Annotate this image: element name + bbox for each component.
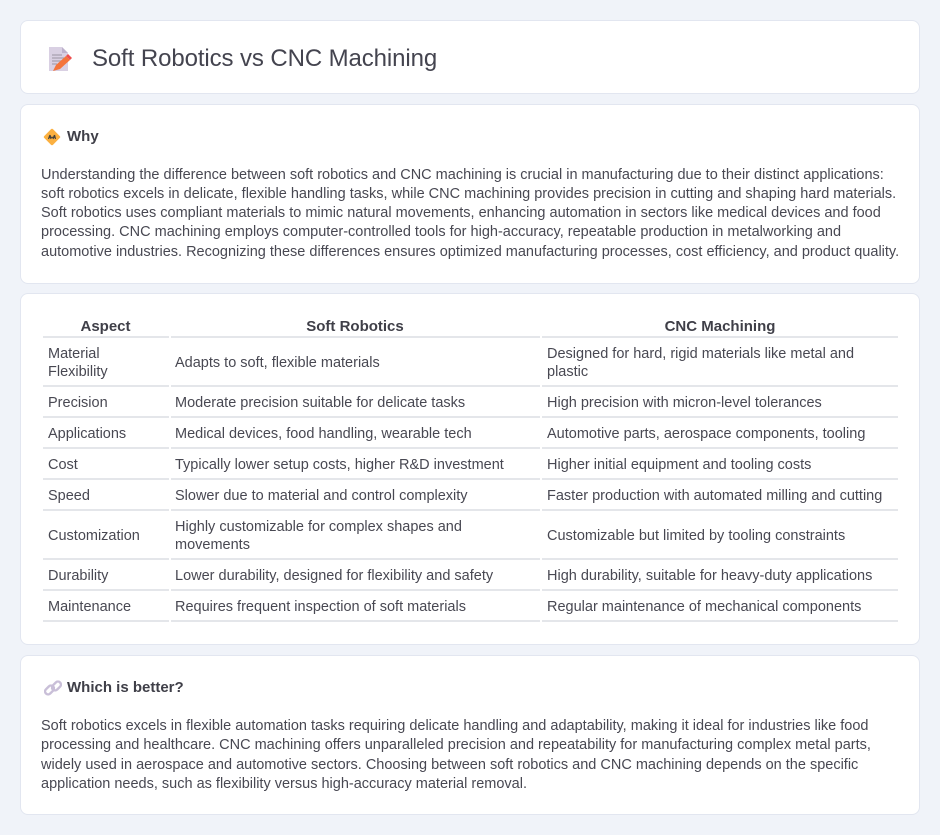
row: durability: High durability, suitable for heavy-duty applications [547, 568, 872, 584]
row: customization: Highly customizable for complex shapes and [175, 519, 462, 535]
row: applications: Automotive parts, aerospace components, tooling [547, 426, 865, 442]
row: customization: movements [175, 537, 250, 553]
icon: chain link [44, 680, 62, 696]
table header: Aspect [80, 318, 131, 335]
heading: which is better: Which is better? [67, 679, 184, 696]
row: cost: Cost [48, 457, 78, 473]
icon: warning diamond [44, 128, 60, 146]
row: speed: Speed [48, 488, 90, 504]
row: durability [48, 568, 872, 584]
why text block: soft robotics excels in delicate, flexible handling tasks, while CNC machining provides precision in cutting and shaping hard materials. [41, 186, 896, 202]
row: applications [48, 426, 865, 442]
row: applications: Applications [48, 426, 126, 442]
row: material flexibility [48, 346, 854, 380]
which is better text block: processing and healthcare. CNC machining offers unparalleled precision and repeatability for manufacturing complex metal parts, [41, 737, 871, 753]
row: maintenance: Maintenance [48, 599, 131, 615]
panel: why [20, 104, 920, 284]
row: precision: High precision with micron-level tolerances [547, 395, 822, 411]
header card [20, 20, 920, 94]
row: material flexibility: Flexibility [48, 364, 108, 380]
row: speed: Slower due to material and control complexity [175, 488, 468, 504]
why text block [41, 167, 899, 260]
row: maintenance [48, 599, 861, 615]
row: cost: Typically lower setup costs, higher R&D investment [175, 457, 504, 473]
row: precision: Precision [48, 395, 108, 411]
row: cost: Higher initial equipment and tooling costs [547, 457, 811, 473]
table header: Soft Robotics [306, 318, 404, 335]
heading: why: Why [67, 128, 99, 145]
row: maintenance: Regular maintenance of mechanical components [547, 599, 861, 615]
row: speed: Faster production with automated milling and cutting [547, 488, 882, 504]
row: maintenance: Requires frequent inspection of soft materials [175, 599, 466, 615]
why text block: Soft robotics uses compliant materials to mimic natural movements, enhancing automation in sectors like medical devices and food [41, 205, 881, 221]
row: customization: Customization [48, 528, 140, 544]
icon: document with pencil [49, 47, 72, 71]
which is better text block: widely used in aerospace and automotive sectors. Choosing between soft robotics and CNC machining depends on the specific [41, 757, 858, 773]
row: material flexibility: plastic [547, 364, 588, 380]
row: material flexibility: Material [48, 346, 100, 362]
why text block: automotive industries. Recognizing these differences ensures optimized manufacturing processes, cost efficiency, and product quality. [41, 244, 899, 260]
which is better text block: application needs, such as flexibility versus high-accuracy material removal. [41, 776, 527, 792]
row: customization [48, 519, 845, 553]
which is better text block [41, 718, 871, 792]
title: Soft Robotics vs CNC Machining [92, 45, 437, 72]
why text block: processing. CNC machining employs computer-controlled tools for high-accuracy, repeatable production in metalworking and [41, 224, 841, 240]
row: applications: Medical devices, food handling, wearable tech [175, 426, 472, 442]
why text block: Understanding the difference between soft robotics and CNC machining is crucial in manufacturing due to their distinct applications: [41, 167, 884, 183]
row: material flexibility: Adapts to soft, flexible materials [175, 355, 380, 371]
row: durability: Durability [48, 568, 108, 584]
row: cost [48, 457, 811, 473]
row: material flexibility: Designed for hard, rigid materials like metal and [547, 346, 854, 362]
table header: CNC Machining [665, 318, 775, 335]
which is better text block: Soft robotics excels in flexible automation tasks requiring delicate handling and adaptability, making it ideal for industries like food [41, 718, 868, 734]
panel: comparison table [20, 293, 920, 645]
row: durability: Lower durability, designed for flexibility and safety [175, 568, 493, 584]
panel: which is better [20, 655, 920, 815]
table header [80, 318, 775, 335]
row: speed [48, 488, 882, 504]
row: precision: Moderate precision suitable for delicate tasks [175, 395, 465, 411]
row: customization: Customizable but limited by tooling constraints [547, 528, 845, 544]
row: precision [48, 395, 822, 411]
